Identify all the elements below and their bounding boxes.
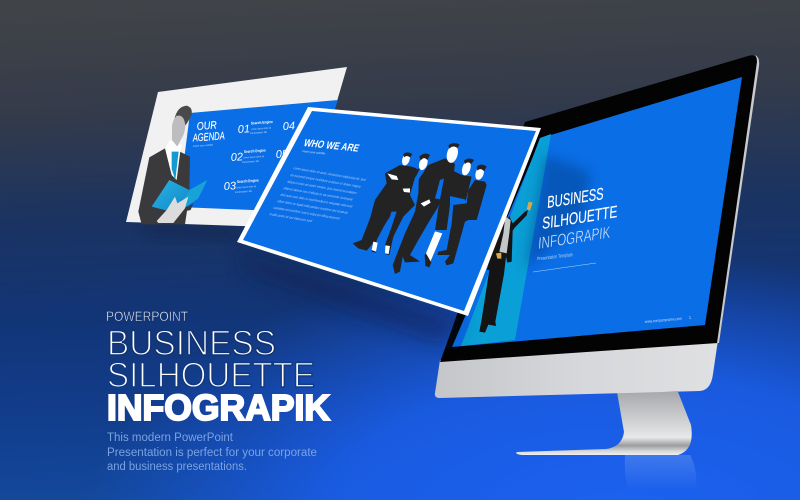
screen heading: SILHOUETTE (542, 202, 618, 233)
screen heading: INFOGRAPIK (538, 222, 611, 253)
monitor stand (516, 392, 692, 455)
monitor stand reflection (625, 455, 696, 490)
item 01 (238, 120, 273, 134)
person 5 (437, 180, 487, 265)
slide shadows (140, 222, 465, 345)
item 04: 04 (282, 120, 295, 133)
person 2 (372, 168, 420, 255)
teal band (461, 134, 551, 346)
hair (403, 143, 487, 171)
who we are body text: aliqua ut enim ad minim veniam, quis nostrud exercitation (286, 180, 358, 195)
monitor screen (452, 77, 742, 347)
blue shirts (410, 173, 466, 205)
item 03: Lorem ipsum dolor sit (236, 185, 256, 189)
description (107, 432, 317, 473)
person 4 bare leg (425, 231, 442, 263)
white cuffs and socks (372, 173, 431, 254)
who we are blue panel (243, 111, 536, 311)
screen footer: www.companyname.com (645, 316, 682, 324)
who we are body text: duis aute irure dolor in reprehenderit in voluptate velit esse (279, 193, 354, 208)
agenda items (223, 120, 295, 194)
agenda heading: AGENDA (192, 130, 225, 145)
who we are body text: mollit anim id est laborum sed (268, 212, 313, 223)
item 01: consectetur elit (250, 131, 267, 135)
agenda heading: OUR (196, 120, 217, 133)
person 1 (353, 165, 417, 251)
item 01: Lorem ipsum dolor sit (251, 127, 271, 131)
agenda heading: Insert your subtitle (193, 143, 214, 148)
screen heading (537, 184, 618, 263)
item 02: 02 (230, 151, 243, 164)
monitor silver edge (717, 55, 759, 343)
headline block (106, 308, 330, 473)
monitor (435, 55, 759, 490)
item 02: Search Engine (244, 148, 266, 154)
item 01: Search Engine (251, 120, 273, 125)
slide: who we are (237, 107, 541, 316)
team silhouette (353, 143, 487, 274)
slide shadow on screen (525, 155, 590, 270)
description: Presentation is perfect for your corporate (107, 447, 317, 459)
monitor bezel (440, 55, 757, 362)
item 02 (231, 149, 266, 163)
businessman with book (138, 106, 207, 224)
agenda blue panel (178, 100, 338, 212)
person 4 (435, 170, 472, 230)
item 05: 05 (275, 148, 289, 161)
screen footer: 1 (689, 315, 692, 320)
item 02: consectetur elit (242, 160, 259, 164)
screen divider (533, 263, 596, 272)
item 03: Search Engine (237, 178, 259, 184)
who we are body text: cupidatat non proident, sunt in culpa qui officia deserunt (272, 206, 341, 220)
business title: BUSINESS (107, 324, 276, 363)
screen heading: BUSINESS (547, 184, 604, 212)
item 01: 01 (237, 123, 250, 136)
presenter figure (479, 202, 533, 333)
monitor chin (435, 340, 718, 398)
item 03: 03 (223, 180, 237, 193)
faces (401, 144, 486, 181)
item 03 (224, 179, 259, 193)
who we are body text: do eiusmod tempor incididunt ut labore et dolore magna (289, 173, 362, 189)
item 03: consectetur elit (235, 190, 252, 194)
slide: our agenda (126, 67, 347, 228)
item 02: Lorem ipsum dolor sit (243, 155, 264, 159)
who we are subtitle: Insert your subtitle (302, 149, 326, 155)
description: and business presentations. (107, 461, 247, 473)
agenda heading (192, 120, 225, 148)
screen heading: Presentation Template (537, 252, 573, 263)
person 3 (393, 158, 455, 274)
who we are body text (268, 166, 367, 223)
who we are heading: WHO WE ARE (302, 137, 361, 155)
who we are body text: Lorem ipsum dolor sit amet, consectetur adipiscing elit. Sed (292, 166, 367, 182)
infograpik title: INFOGRAPIK (107, 387, 330, 428)
description: This modern PowerPoint (107, 432, 234, 444)
silhouette title: SILHOUETTE (107, 356, 315, 395)
powerpoint label: POWERPOINT (106, 308, 188, 324)
who we are body text: ullamco laboris nisi ut aliquip ex ea commodo consequat (282, 186, 354, 201)
who we are body text: cillum dolore eu fugiat nulla pariatur excepteur sint occaecat (276, 199, 349, 215)
